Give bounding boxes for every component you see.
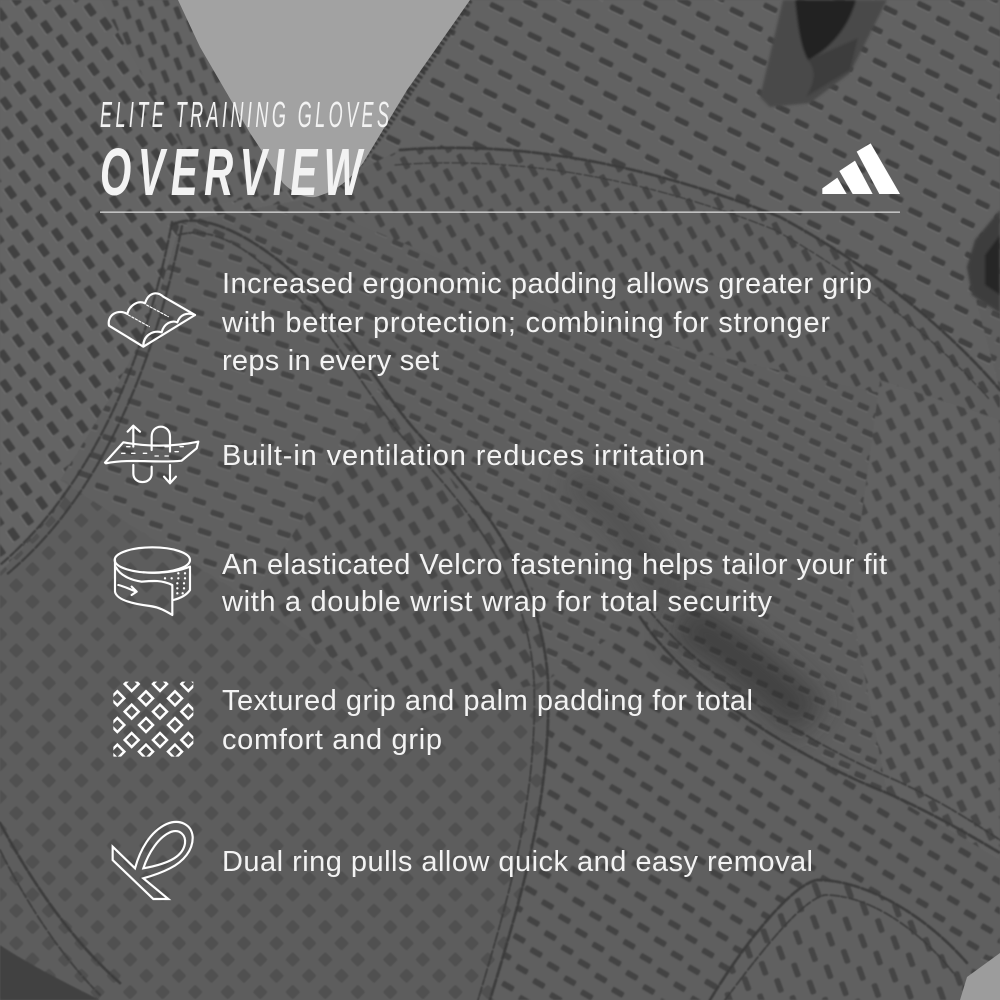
icon: ventilation (105, 426, 198, 483)
icon: diamond texture (113, 682, 194, 757)
text: ring pulls: Dual ring pulls allow quick and easy removal (222, 846, 813, 878)
feature: velcro (115, 547, 887, 618)
text: textured grip: Textured grip and palm padding for total (222, 685, 753, 717)
gap between fingers (178, 0, 470, 197)
text: velcro: An elasticated Velcro fastening helps tailor your fit (222, 549, 887, 581)
finger openings (760, 0, 1000, 313)
icon: padded layers (109, 293, 195, 347)
palm shading (680, 620, 810, 720)
text: textured grip (222, 685, 753, 756)
bottom right gap (960, 953, 1000, 1000)
text: textured grip: comfort and grip (222, 724, 442, 756)
icon: wrist wrap (115, 547, 190, 615)
feature: padding (109, 268, 872, 377)
adidas logo (822, 143, 900, 194)
text: padding (221, 268, 872, 377)
text: padding: Increased ergonomic padding allows greater grip (222, 268, 872, 300)
subtitle: ELITE TRAINING GLOVES (100, 95, 389, 136)
text: velcro: with a double wrist wrap for total security (221, 586, 772, 618)
text: padding: with better protection; combining for stronger (221, 307, 830, 339)
feature: ventilation (105, 426, 705, 483)
icon: ring pull (113, 822, 193, 899)
text: ventilation: Built-in ventilation reduces irritation (222, 440, 705, 472)
text: padding: reps in every set (222, 345, 439, 377)
title (100, 95, 389, 210)
feature: ring pulls (113, 822, 813, 899)
text: velcro (221, 549, 887, 618)
heading: OVERVIEW (100, 134, 365, 210)
feature: textured grip (110, 677, 753, 759)
